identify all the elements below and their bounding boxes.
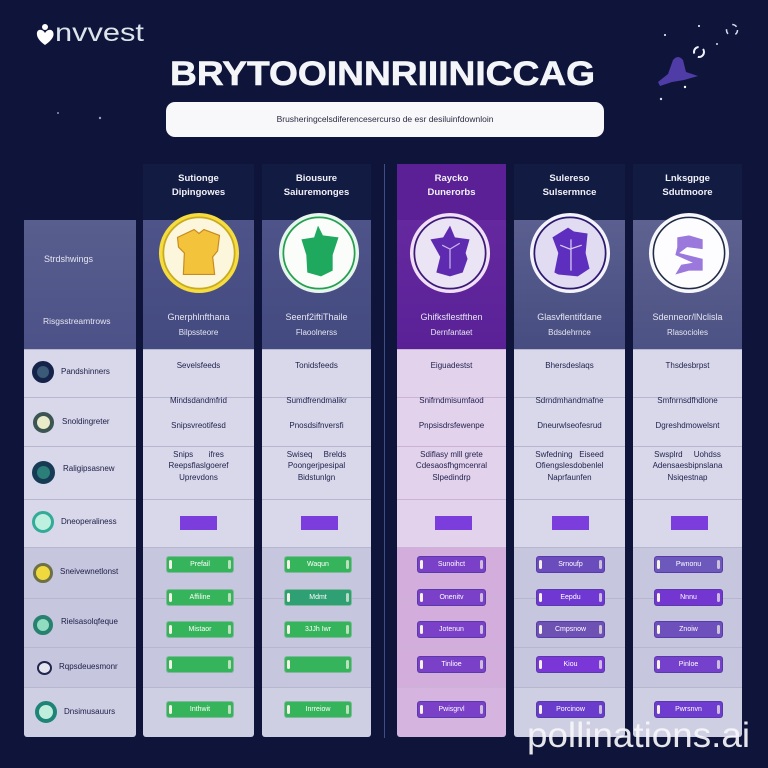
column heading: Saiuremonges — [284, 187, 349, 198]
status badges: Kiou — [563, 661, 578, 668]
status badges — [536, 556, 605, 718]
decorative figure top right — [658, 24, 738, 100]
row values: Bhersdeslaqs — [545, 361, 594, 370]
row values: Naprfaunfen — [547, 473, 592, 482]
icon: pale violet badge — [648, 213, 730, 293]
status badges: Pwisgrvl — [438, 706, 465, 713]
band text: Bilpssteore — [179, 328, 218, 337]
status badges: Cmpsnow — [555, 626, 586, 633]
band text — [285, 312, 348, 337]
status badges: Mistaor — [189, 626, 211, 633]
label: row 4: Dneoperaliness — [61, 517, 117, 526]
purple marker — [552, 516, 589, 530]
row values — [168, 361, 229, 482]
icon: row 7 — [37, 661, 52, 675]
band text — [537, 312, 602, 337]
subtitle pill: Brusheringcelsdiferencesercurso de esr desiluinfdownloin — [277, 114, 493, 124]
watermark: pollinations.ai — [527, 716, 750, 755]
status badges: Mdmt — [309, 594, 327, 601]
purple marker — [180, 516, 217, 530]
label: row 8: Dnsimusauurs — [64, 707, 115, 716]
row values: Swfedning Eiseed — [535, 450, 604, 459]
row values: Thsdesbrpst — [665, 361, 710, 370]
label: row 7: Rqpsdeuesmonr — [59, 662, 118, 671]
row values: Tonidsfeeds — [295, 361, 338, 370]
band text: Seenf2iftiThaile — [285, 312, 348, 322]
row values: Snifrndmisumfaod — [419, 396, 484, 405]
band text: Dernfantaet — [431, 328, 472, 337]
row values: Smfnrnsdfhdlone — [657, 396, 718, 405]
status badges: Inthwit — [190, 706, 210, 713]
column heading — [427, 173, 476, 198]
row values: Sumdfrendmalikr — [286, 396, 347, 405]
subtitle pill — [166, 102, 604, 137]
status badges: Porcinow — [556, 706, 585, 713]
status badges: Prefail — [190, 561, 210, 568]
status badges: Nnnu — [680, 594, 697, 601]
status badges: Eepdu — [560, 594, 581, 601]
panel: row labels — [24, 220, 136, 737]
row values — [535, 361, 604, 482]
status badges: Onenitv — [439, 594, 464, 601]
row values — [652, 361, 722, 482]
row label header band — [24, 220, 136, 349]
logo — [36, 20, 144, 46]
purple marker — [671, 516, 708, 530]
status badges: Inrreiow — [306, 706, 330, 713]
row values: Uprevdons — [179, 473, 218, 482]
icon: row 3 — [32, 461, 55, 484]
panel: column 2 green — [262, 173, 371, 737]
status badges: Waqun — [307, 561, 329, 568]
icon: gold badge — [158, 213, 240, 293]
row values: Poongerjpesipal — [288, 461, 345, 470]
band text — [167, 312, 230, 337]
status badges: Tinlioe — [441, 661, 462, 668]
purple marker — [435, 516, 472, 530]
status badges: Jotenun — [439, 626, 464, 633]
label: row 5: Sneivewnetlonst — [60, 567, 118, 576]
panel: column 3 highlighted purple — [397, 164, 506, 737]
status badges: Pwnonu — [676, 561, 701, 568]
column heading — [542, 173, 596, 198]
column heading: Sulereso — [549, 173, 590, 184]
icon: row 5 — [33, 563, 53, 583]
icon: row 1 — [32, 361, 54, 383]
band text: Glasvflentifdane — [537, 312, 602, 322]
status badges — [166, 556, 234, 718]
column heading: Dipingowes — [172, 187, 225, 198]
column heading: Sulsermnce — [543, 187, 596, 198]
row values: Reepsflaslgoeref — [168, 461, 229, 470]
status badges: Sunoihct — [438, 561, 465, 568]
decorative stars left — [57, 112, 102, 120]
column heading: Lnksgpge — [665, 173, 710, 184]
row values: Snips ifres — [173, 450, 224, 459]
center divider — [384, 164, 385, 738]
icon: row 4 — [32, 511, 54, 533]
panel: column 4 violet — [514, 173, 625, 737]
row values: Swsplrd Uohdss — [654, 450, 721, 459]
column heading: Sdutmoore — [662, 187, 713, 198]
row values: Adensaesbipnslana — [653, 461, 722, 470]
icon: logo heart — [36, 24, 54, 45]
row backgrounds — [24, 349, 136, 737]
label: row 2: Snoldingreter — [62, 417, 110, 426]
row values: Pnpsisdrsfewenpe — [419, 421, 484, 430]
column heading: Dunerorbs — [427, 187, 476, 198]
icon: purple badge — [410, 213, 490, 293]
label: bottom: Risgsstreamtrows — [43, 316, 111, 326]
row values: Sevelsfeeds — [177, 361, 220, 370]
band text — [420, 312, 483, 337]
row values: Swiseq Brelds — [287, 450, 346, 459]
status badges: Pinloe — [679, 661, 698, 668]
icon: row 8 — [35, 701, 57, 723]
row values: Sdrndmhandmafne — [535, 396, 604, 405]
row values: Nsiqestnap — [667, 473, 708, 482]
band text: Bdsdehrnce — [548, 328, 591, 337]
label: row 3: Raligipsasnew — [63, 464, 115, 473]
row values: Mindsdandmfrid — [170, 396, 227, 405]
row values: Pnosdsifnversfi — [289, 421, 344, 430]
row values — [416, 361, 487, 482]
icon: violet badge — [530, 213, 610, 293]
status badges: Pwrsnvn — [675, 706, 702, 713]
column heading — [172, 173, 225, 198]
status badges — [284, 556, 352, 718]
label: top: Strdshwings — [44, 254, 93, 264]
row values: Slpedindrp — [432, 473, 471, 482]
status badges: Znoiw — [679, 626, 698, 633]
title: BRYTOOINNRIIINICCAG — [170, 55, 595, 92]
panel: column 5 pale violet — [633, 173, 742, 737]
row values: Dneurwlseofesrud — [537, 421, 602, 430]
status badges — [654, 556, 723, 718]
band text: Ghifksflestfthen — [420, 312, 483, 322]
band text — [652, 312, 723, 337]
column heading — [662, 173, 713, 198]
column heading: Sutionge — [178, 173, 219, 184]
row values: Dgreshdmowelsnt — [655, 421, 720, 430]
panel: column 1 gold — [143, 173, 254, 737]
band text: Gnerphlnfthana — [167, 312, 230, 322]
label: row 1: Pandshinners — [61, 367, 110, 376]
row values: Eiguadestst — [431, 361, 472, 370]
status badges: 3JJh Iwr — [305, 626, 331, 633]
column heading — [284, 173, 349, 198]
row values: Ofiengslesdobenlel — [535, 461, 604, 470]
status badges: Affiline — [190, 594, 210, 601]
label: row 6: Rielsasolqfeque — [61, 617, 118, 626]
status badges — [417, 556, 486, 718]
column heading: Biousure — [296, 173, 337, 184]
row values: Bidstunlgn — [298, 473, 335, 482]
icon: row 2 — [33, 412, 54, 433]
band text: Flaoolnerss — [296, 328, 337, 337]
band text: Sdenneor/lNclisla — [652, 312, 723, 322]
purple marker — [301, 516, 338, 530]
row values: Cdesaosfhgmcenral — [416, 461, 487, 470]
icon: green badge — [278, 213, 360, 293]
column heading: Raycko — [435, 173, 468, 184]
row values: Snipsvreotifesd — [171, 421, 226, 430]
band text: Rlasocioles — [667, 328, 708, 337]
status badges: Srnoufp — [558, 561, 583, 568]
icon: row 6 — [33, 615, 53, 635]
row values: Sdiflasy mlll grete — [420, 450, 483, 459]
row values — [286, 361, 347, 482]
